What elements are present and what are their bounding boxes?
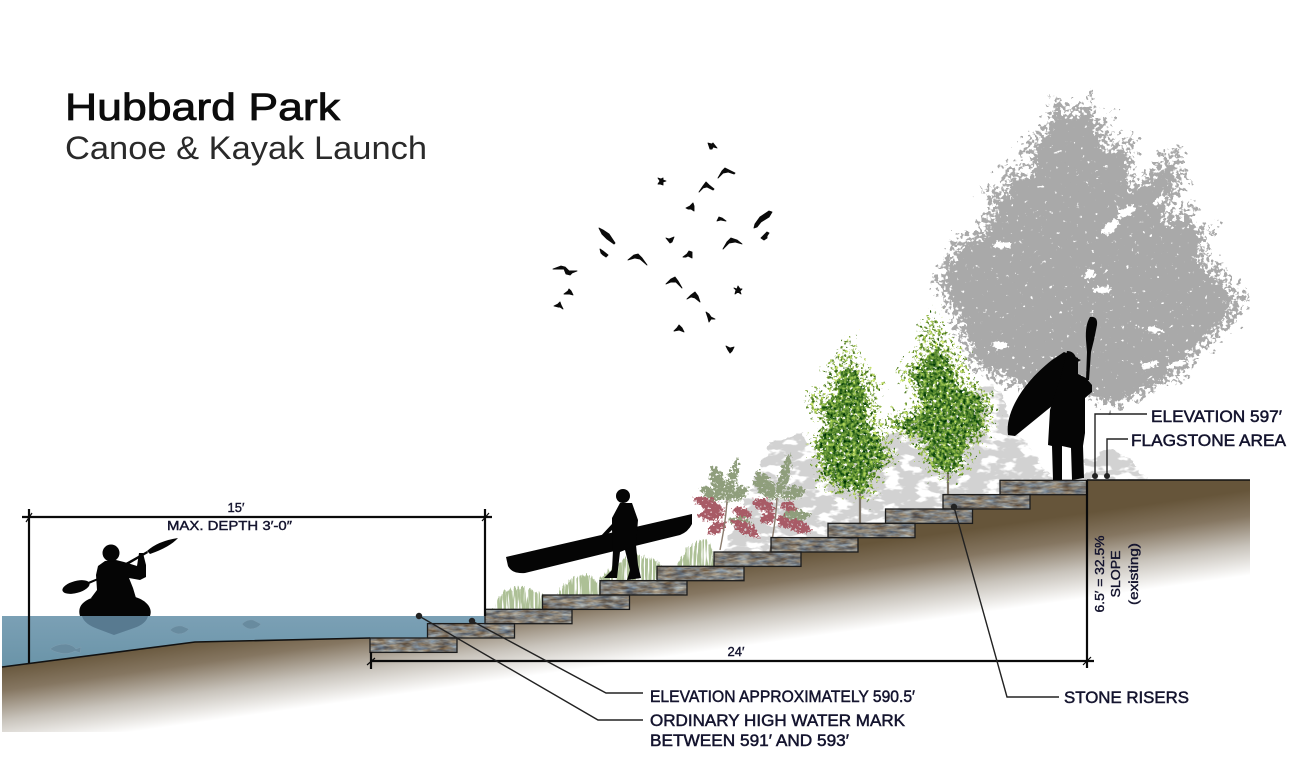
- stone steps: [370, 480, 1087, 652]
- callout: elevation 597: [1092, 408, 1282, 479]
- kayak reflection: [82, 616, 148, 635]
- kayaker silhouette: [61, 538, 178, 616]
- callout: ordinary high water mark: [416, 613, 905, 750]
- dimension: max depth: MAX. DEPTH 3′-0″: [167, 518, 292, 533]
- callout: elevation 590.5: ELEVATION APPROXIMATELY 590.5′: [650, 688, 915, 706]
- young green trees: [808, 310, 993, 500]
- person with kayak and paddle silhouette: [1008, 317, 1097, 480]
- slope annotation: (existing): [1126, 543, 1141, 605]
- grass tufts: [493, 540, 716, 610]
- callout: elevation 597: ELEVATION 597′: [1151, 408, 1282, 426]
- fish: [50, 620, 261, 654]
- title: Hubbard Park: [65, 87, 341, 129]
- callout: flagstone area: [1104, 432, 1286, 479]
- fern shadows: [720, 383, 1147, 560]
- big grey background tree: [933, 95, 1248, 408]
- ground section: [2, 480, 1250, 732]
- callout: stone risers: STONE RISERS: [1064, 689, 1189, 707]
- callout: flagstone area: FLAGSTONE AREA: [1131, 432, 1286, 450]
- sumac shrubs: [693, 453, 812, 552]
- slope annotation: 6.5′ = 32.5%: [1092, 535, 1107, 613]
- callout: stone risers: [951, 504, 1189, 707]
- callout: ordinary high water mark: BETWEEN 591′ AND 593′: [650, 732, 849, 750]
- dimension: 15 feet: 15′: [228, 500, 245, 515]
- title: [65, 87, 427, 166]
- dimension: 24 feet: 24′: [728, 644, 745, 659]
- title: Canoe & Kayak Launch: [65, 130, 427, 166]
- slope annotation: SLOPE: [1108, 550, 1123, 598]
- slope annotation: [1092, 535, 1141, 612]
- water: [2, 616, 485, 667]
- tree trunks: [860, 472, 948, 525]
- callout: ordinary high water mark: ORDINARY HIGH WATER MARK: [650, 712, 905, 730]
- person carrying canoe silhouette: [506, 489, 692, 580]
- dimension lines: [22, 480, 1094, 669]
- callout: elevation 590.5: [469, 618, 915, 706]
- icon: flock of birds: [553, 143, 772, 353]
